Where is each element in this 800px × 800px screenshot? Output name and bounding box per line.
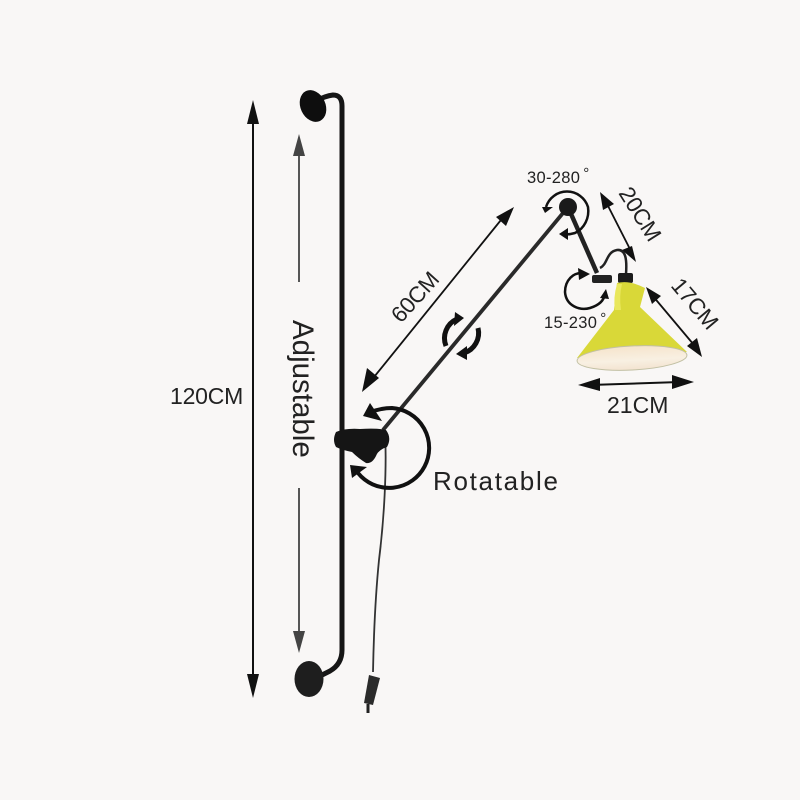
label: Rotatable: Rotatable: [433, 466, 560, 496]
label: 15-230 degrees: °: [600, 310, 606, 327]
lamp: yellow shade: [576, 282, 688, 373]
label: Adjustable: Adjustable: [286, 320, 319, 458]
lamp: swivel joint: [334, 429, 389, 463]
dimension arrow: 17CM: [646, 287, 702, 357]
label: 17CM: 17CM: [666, 273, 723, 334]
dimension arrow: 120CM height: [247, 100, 259, 698]
dimension arrow: 21CM: [578, 375, 694, 391]
shade opening: [576, 343, 688, 373]
lamp: long arm: [383, 207, 568, 430]
label: 30-280 degrees: °: [583, 165, 590, 182]
dimension arrow: 60CM: [362, 207, 514, 392]
mount: bottom disc: [294, 661, 324, 697]
rotation arrow: shade pivot: [565, 268, 609, 309]
rotation arrow at joint: [350, 403, 429, 488]
adjustable range arrows: [293, 134, 305, 653]
label: 20CM: 20CM: [614, 182, 666, 246]
lamp: wire loop and knuckle: [592, 250, 633, 283]
label: 30-280 degrees: 30-280: [527, 169, 580, 187]
rotation icon on arm: [444, 312, 479, 360]
lamp: short arm: [559, 198, 597, 273]
dimension arrow: 20CM: [600, 192, 636, 262]
label: 120CM: 120CM: [170, 383, 243, 409]
label: 60CM: 60CM: [386, 267, 444, 327]
label: 15-230 degrees: 15-230: [544, 314, 597, 332]
mount: top disc: [295, 86, 331, 126]
lamp: wall rod with mounts: [294, 86, 342, 697]
rotation arrow: top pivot: [542, 192, 588, 240]
lamp: power cord and switch: [364, 430, 386, 713]
label: 21CM: 21CM: [607, 392, 668, 418]
